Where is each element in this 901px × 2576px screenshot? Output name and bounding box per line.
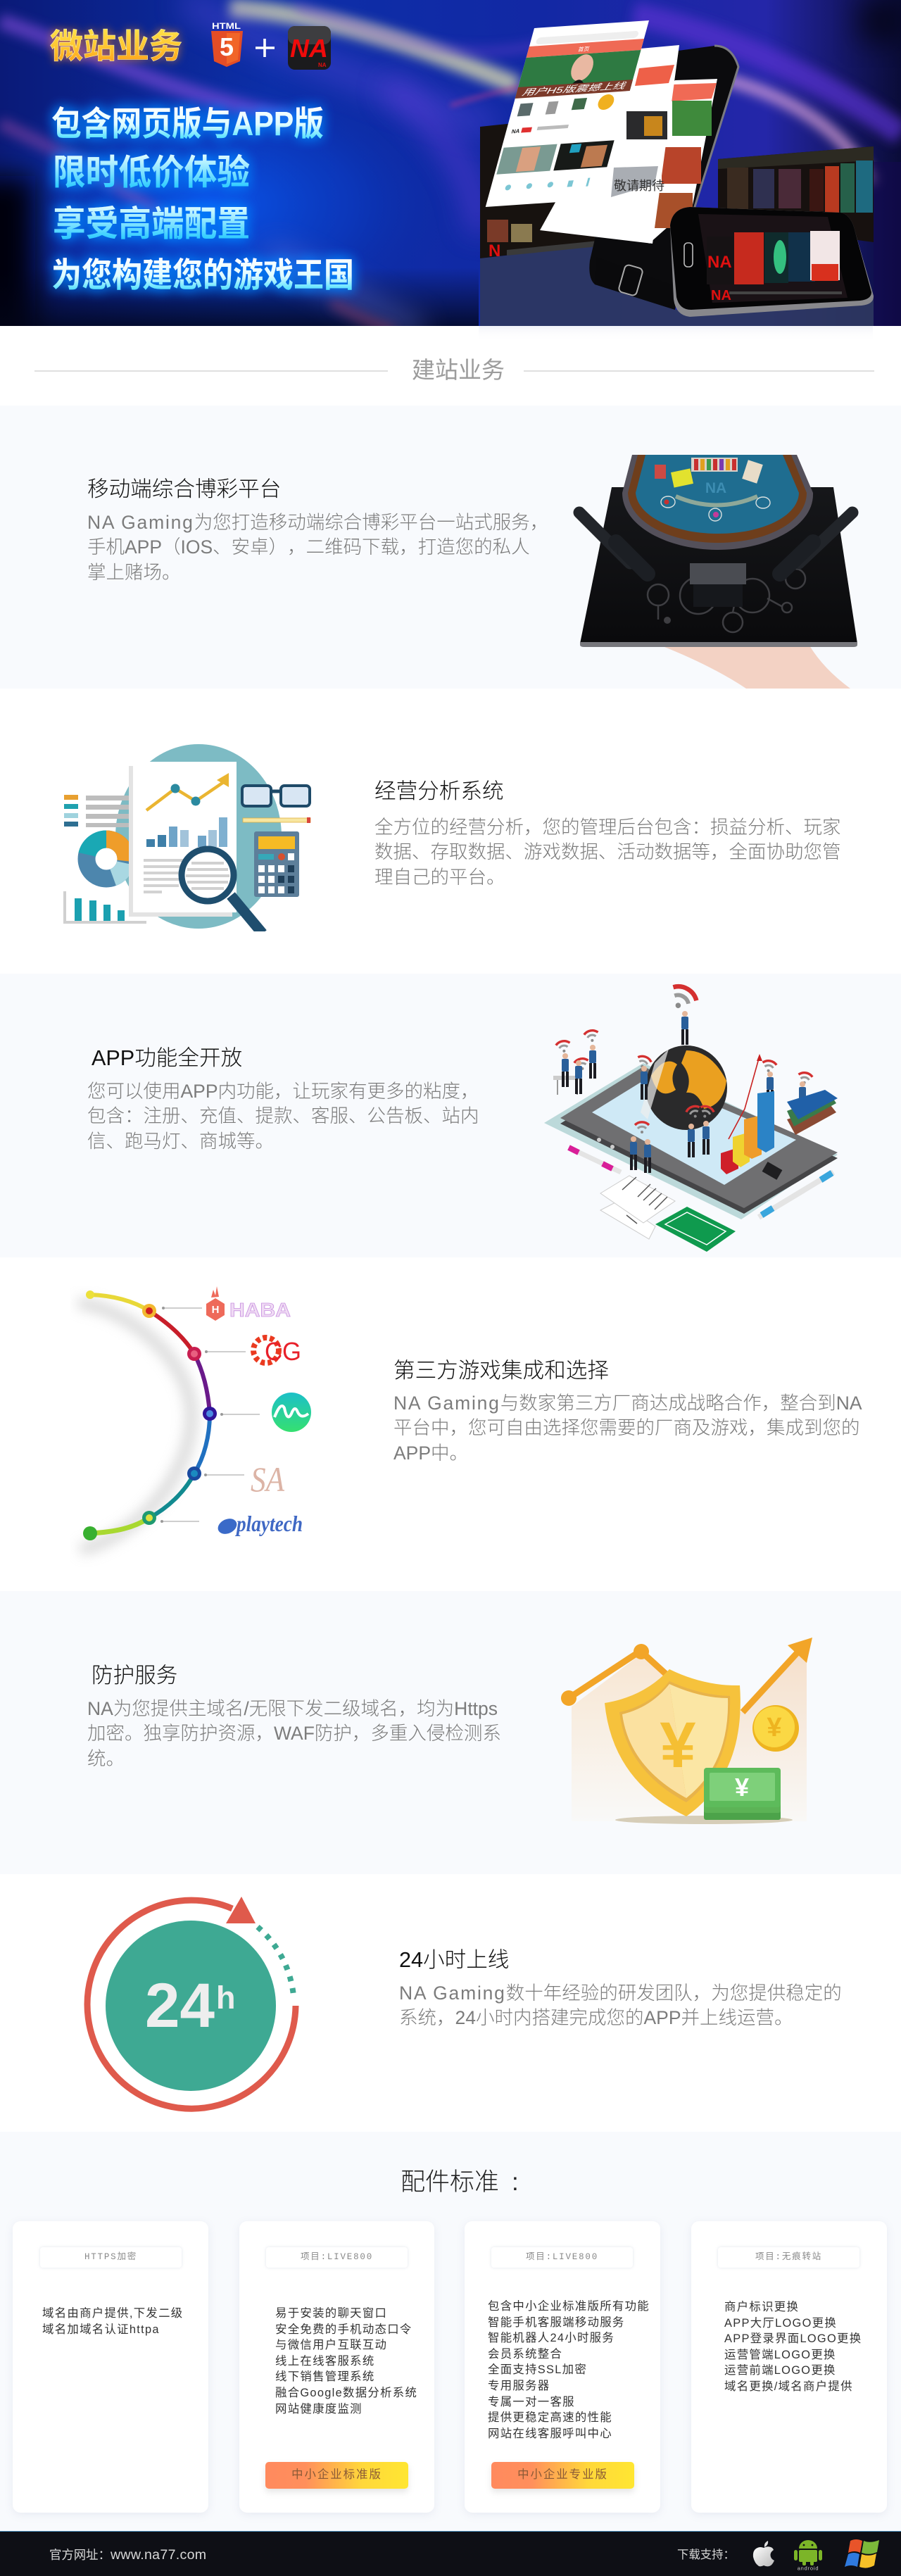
text block bbox=[87, 1081, 479, 1152]
icon: plus bbox=[256, 39, 275, 57]
page 1: NA bbox=[511, 128, 521, 134]
card label: 项目:无痕转站 bbox=[755, 2252, 822, 2262]
illustration: tablet with blackjack table bbox=[573, 455, 859, 689]
text block: 掌上赌场。 bbox=[87, 562, 180, 583]
text block: 系统，24小时内搭建完成您的APP并上线运营。 bbox=[399, 2007, 793, 2028]
icon: NA logo bbox=[288, 26, 331, 70]
papers bbox=[600, 1201, 655, 1239]
card list: 域名由商户提供,下发二级 bbox=[42, 2307, 183, 2320]
bars bbox=[721, 1054, 774, 1174]
card label: 项目:LIVE800 bbox=[526, 2252, 598, 2262]
heading: 配件标准 : bbox=[401, 2168, 519, 2196]
icon: android bbox=[794, 2540, 822, 2570]
books bbox=[787, 1090, 838, 1135]
card list: 智能手机客服端移动服务 bbox=[488, 2316, 625, 2329]
card list: 会员系统整合 bbox=[488, 2348, 562, 2361]
text block bbox=[87, 1698, 501, 1769]
card list bbox=[488, 2299, 650, 2440]
icon: HTML5 badge: HTML bbox=[212, 21, 241, 31]
text block: NA为您提供主域名/无限下发二级域名，均为Https bbox=[87, 1698, 498, 1719]
card list: APP登录界面LOGO更换 bbox=[724, 2332, 862, 2345]
hero banner bbox=[0, 0, 901, 329]
logo: green M bbox=[272, 1393, 311, 1432]
card list bbox=[42, 2306, 183, 2336]
text block: 理自己的平台。 bbox=[374, 867, 505, 888]
logo: CG: CG bbox=[265, 1337, 301, 1366]
button bbox=[265, 2462, 408, 2489]
streaks bbox=[229, 8, 517, 86]
device mockups: 敬请期待 bbox=[614, 179, 664, 193]
heading: APP功能全开放 bbox=[92, 1046, 242, 1070]
logo: HABA: H bbox=[212, 1304, 219, 1316]
heading: 防护服务 bbox=[92, 1664, 177, 1688]
device mockups: NA bbox=[711, 288, 731, 303]
card list: 易于安装的聊天窗口 bbox=[275, 2307, 387, 2320]
text block: APP中。 bbox=[393, 1443, 468, 1464]
card list: 全面支持SSL加密 bbox=[488, 2363, 587, 2376]
illustration: shield with yen: ¥ bbox=[767, 1713, 782, 1742]
illustration: shield with yen: ¥ bbox=[660, 1709, 696, 1781]
illustration: arc timeline with provider logos bbox=[75, 1286, 311, 1557]
glasses bbox=[242, 786, 310, 806]
illustration: 24h clock ring bbox=[84, 1897, 298, 2112]
card label bbox=[718, 2247, 859, 2268]
logo: HABA: HABA bbox=[229, 1299, 291, 1321]
coin bbox=[752, 1705, 799, 1752]
device mockups: NA bbox=[707, 253, 732, 272]
page 1: 用户H5版震撼上线 bbox=[521, 81, 628, 97]
icon: apple bbox=[753, 2541, 774, 2567]
text block: 您可以使用APP内功能，让玩家有更多的粘度， bbox=[87, 1081, 479, 1102]
text block bbox=[374, 817, 840, 888]
heading: 24小时上线 bbox=[399, 1948, 509, 1972]
illustration: data analysis bbox=[63, 744, 311, 931]
heading: 微站业务: 微站业务 bbox=[50, 28, 182, 65]
heading: 经营分析系统 bbox=[374, 779, 504, 803]
card: HTTPS bbox=[13, 2221, 208, 2513]
page 2 bbox=[540, 45, 679, 244]
heading: 移动端综合博彩平台 bbox=[87, 477, 281, 501]
card list: 域名更换/域名商户提供 bbox=[724, 2380, 853, 2393]
page 1: 首页 bbox=[577, 45, 591, 53]
icon: HTML5 badge bbox=[211, 21, 243, 67]
icon: windows bbox=[845, 2539, 879, 2568]
logo: playtech: playtech bbox=[234, 1511, 303, 1536]
text block bbox=[399, 1983, 842, 2028]
card list: 提供更稳定高速的性能 bbox=[488, 2411, 612, 2424]
hero slogans: 包含网页版与APP版 bbox=[51, 106, 324, 143]
card list: 商户标识更换 bbox=[724, 2301, 799, 2313]
text block: NA Gaming与数家第三方厂商达成战略合作，整合到NA bbox=[393, 1393, 862, 1414]
shield bbox=[605, 1669, 741, 1816]
back right screen bbox=[718, 146, 874, 242]
button: 中小企业标准版 bbox=[291, 2468, 382, 2481]
card list: 智能机器人24小时服务 bbox=[488, 2332, 615, 2344]
card list: 运营前端LOGO更换 bbox=[724, 2364, 836, 2377]
text block: 信、跑马灯、商城等。 bbox=[87, 1131, 274, 1152]
panel: mobile gaming platform bbox=[0, 406, 901, 689]
download support label: 下载支持： bbox=[677, 2549, 735, 2561]
card list: 与微信用户互联互动 bbox=[275, 2339, 387, 2351]
pencil bbox=[243, 818, 310, 822]
card list: APP大厅LOGO更换 bbox=[724, 2317, 837, 2330]
heading: 第三方游戏集成和选择 bbox=[393, 1359, 609, 1383]
illustration: 24h clock ring: h bbox=[216, 1980, 235, 2016]
card list: 专属一对一客服 bbox=[488, 2396, 575, 2408]
card list: 线上在线客服系统 bbox=[275, 2355, 375, 2368]
card: LIVE800 professional bbox=[465, 2221, 660, 2513]
hero slogans: 享受高端配置 bbox=[53, 204, 250, 244]
text block: 加密。独享防护资源，WAF防护，多重入侵检测系 bbox=[87, 1723, 501, 1744]
panel: third party games bbox=[0, 1257, 901, 1591]
logo: HABA bbox=[206, 1286, 291, 1321]
illustration: tablet with blackjack table: NA bbox=[705, 480, 726, 496]
card list: 网站在线客服呼叫中心 bbox=[488, 2427, 612, 2440]
icon: NA logo: NA bbox=[290, 34, 328, 63]
panel: 24 hours online bbox=[0, 1874, 901, 2132]
magnifier bbox=[231, 896, 263, 934]
section title: 建站业务: 建站业务 bbox=[412, 357, 505, 383]
website address: 官方网址：www.na77.com bbox=[49, 2547, 206, 2563]
panel: analytics system bbox=[0, 689, 901, 974]
text block bbox=[393, 1393, 862, 1464]
card list: 线下销售管理系统 bbox=[275, 2370, 375, 2383]
illustration: shield with yen: ¥ bbox=[735, 1773, 749, 1802]
device mockups bbox=[480, 20, 874, 317]
hero slogans bbox=[51, 106, 354, 294]
hero slogans: 限时低价体验 bbox=[53, 153, 250, 192]
text block bbox=[87, 512, 548, 583]
panel: APP features bbox=[0, 974, 901, 1257]
text block: 平台中，您可自由选择您需要的厂商及游戏，集成到您的 bbox=[393, 1417, 860, 1438]
card: LIVE800 standard bbox=[239, 2221, 434, 2513]
text block: 统。 bbox=[87, 1748, 125, 1769]
footer bbox=[0, 2531, 901, 2576]
logo: playtech bbox=[215, 1511, 303, 1537]
panel: protection service bbox=[0, 1591, 901, 1874]
page 1 bbox=[486, 20, 649, 207]
icon: NA logo: NA bbox=[318, 62, 327, 68]
card list: 域名加域名认证httpa bbox=[42, 2323, 160, 2336]
text block: NA Gaming为您打造移动端综合博彩平台一站式服务， bbox=[87, 512, 548, 533]
card label bbox=[491, 2247, 633, 2268]
illustration: shield with yen bbox=[561, 1638, 812, 1824]
page 3 on screen bbox=[634, 79, 717, 244]
button: 中小企业专业版 bbox=[517, 2468, 608, 2481]
card list: 包含中小企业标准版所有功能 bbox=[488, 2300, 650, 2313]
icon: HTML5 badge: 5 bbox=[220, 32, 234, 61]
calculator bbox=[254, 831, 299, 897]
card: seamless transfer bbox=[691, 2221, 887, 2513]
text block: NA Gaming数十年经验的研发团队，为您提供稳定的 bbox=[399, 1983, 842, 2004]
text block: 手机APP（IOS、安卓），二维码下载，打造您的私人 bbox=[87, 536, 530, 558]
green card bbox=[655, 1207, 736, 1252]
people bbox=[589, 1045, 596, 1079]
pens bbox=[569, 1148, 621, 1172]
logo: SA: SA bbox=[251, 1459, 284, 1499]
donut chart bbox=[87, 839, 126, 879]
reflection floor bbox=[480, 246, 874, 326]
card list: 融合Google数据分析系统 bbox=[275, 2387, 417, 2399]
card list: 专用服务器 bbox=[488, 2380, 550, 2392]
card label bbox=[40, 2247, 182, 2268]
small landscape phone bbox=[670, 207, 874, 317]
card list: 安全免费的手机动态口令 bbox=[275, 2323, 412, 2336]
card label bbox=[266, 2247, 408, 2268]
big phone body bbox=[589, 46, 738, 310]
panel: accessory standards bbox=[0, 2132, 901, 2531]
text block: 包含：注册、充值、提款、客服、公告板、站内 bbox=[87, 1105, 479, 1126]
illustration: isometric tablet and globe bbox=[544, 984, 838, 1252]
card label: 项目:LIVE800 bbox=[301, 2252, 373, 2262]
device mockups: N bbox=[489, 241, 500, 260]
card list bbox=[275, 2306, 417, 2415]
card list: 网站健康度监测 bbox=[275, 2403, 363, 2415]
cash bbox=[704, 1799, 781, 1820]
label: 24h: 24 bbox=[145, 1970, 215, 2040]
card list bbox=[724, 2301, 862, 2393]
hero slogans: 为您构建您的游戏王国 bbox=[51, 257, 354, 294]
globe bbox=[645, 1045, 727, 1130]
card label: HTTPS加密 bbox=[84, 2252, 137, 2262]
card list: 运营管端LOGO更换 bbox=[724, 2349, 836, 2361]
back left screen bbox=[480, 124, 598, 258]
button bbox=[491, 2462, 634, 2489]
text block: 全方位的经营分析，您的管理后台包含：损益分析、玩家 bbox=[374, 817, 840, 838]
text block: 数据、存取数据、游戏数据、活动数据等，全面协助您管 bbox=[374, 841, 840, 862]
